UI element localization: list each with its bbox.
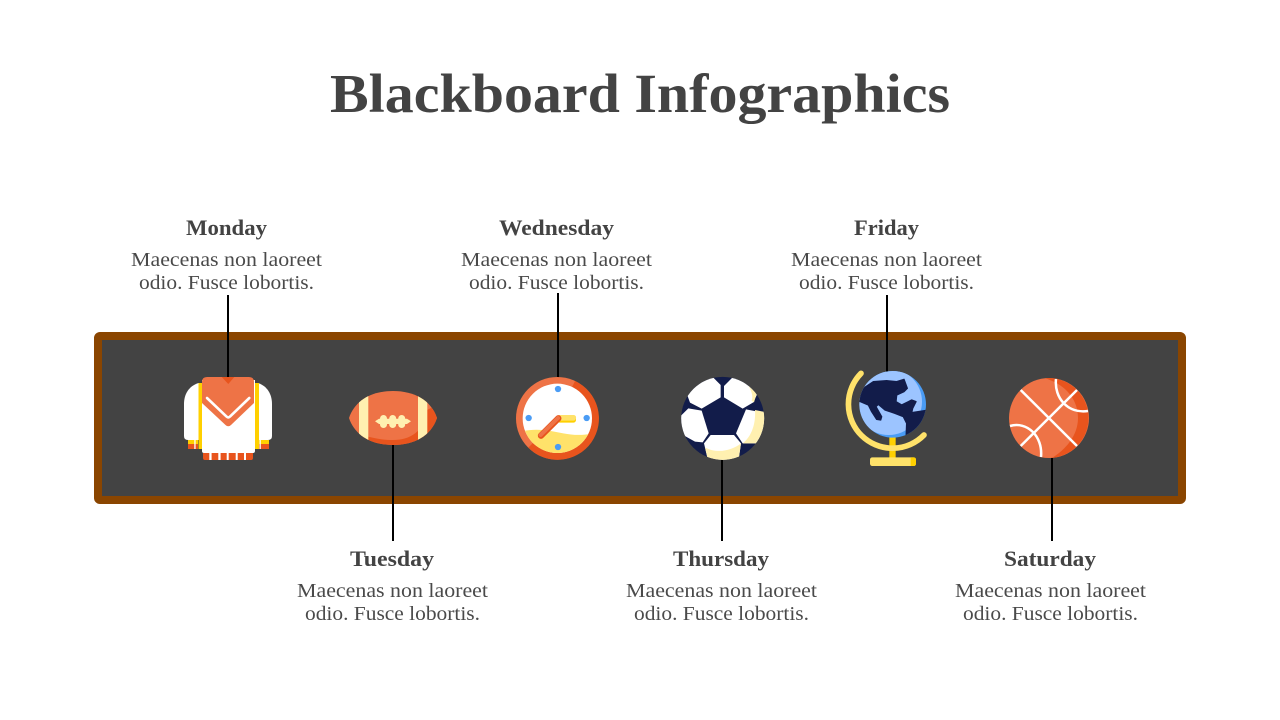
text: Friday: Maecenas non laoreet bbox=[791, 249, 982, 271]
text: Tuesday: odio. Fusce lobortis. bbox=[305, 603, 480, 625]
icon: basketball bbox=[1009, 378, 1089, 458]
text: Friday bbox=[791, 215, 982, 294]
blackboard panel bbox=[98, 336, 1182, 500]
text: Friday: Friday bbox=[854, 215, 919, 240]
icon: football bbox=[349, 391, 437, 446]
connector: Saturday bbox=[1051, 457, 1053, 541]
text: Monday: Maecenas non laoreet bbox=[131, 249, 322, 271]
text: Monday: odio. Fusce lobortis. bbox=[139, 272, 314, 294]
text: Saturday: Maecenas non laoreet bbox=[955, 580, 1146, 602]
connector: Tuesday bbox=[392, 444, 394, 541]
text: Wednesday: Maecenas non laoreet bbox=[461, 249, 652, 271]
connector: Monday bbox=[227, 295, 229, 379]
text: Thursday: Thursday bbox=[673, 546, 769, 571]
connector: Wednesday bbox=[557, 293, 559, 378]
text: Saturday: odio. Fusce lobortis. bbox=[963, 603, 1138, 625]
text: Saturday: Saturday bbox=[1004, 546, 1096, 571]
connector: Friday bbox=[886, 295, 888, 373]
text: Thursday bbox=[626, 546, 817, 625]
icon: soccer ball bbox=[680, 377, 767, 462]
text: Wednesday: odio. Fusce lobortis. bbox=[469, 272, 644, 294]
text: Thursday: Maecenas non laoreet bbox=[626, 580, 817, 602]
text: Wednesday: Wednesday bbox=[499, 215, 614, 240]
text: Monday: Monday bbox=[186, 215, 267, 240]
text: Thursday: odio. Fusce lobortis. bbox=[634, 603, 809, 625]
text: Tuesday bbox=[297, 546, 488, 625]
text: Friday: odio. Fusce lobortis. bbox=[799, 272, 974, 294]
title: Blackboard Infographics bbox=[330, 63, 950, 124]
connector: Thursday bbox=[721, 459, 723, 541]
icon: globe bbox=[848, 368, 928, 466]
text: Tuesday: Maecenas non laoreet bbox=[297, 580, 488, 602]
icon: sweater bbox=[184, 377, 272, 460]
icon: clock bbox=[516, 377, 599, 460]
text: Saturday bbox=[955, 546, 1146, 625]
text: Tuesday: Tuesday bbox=[350, 546, 434, 571]
text: Wednesday bbox=[461, 215, 652, 294]
text: Monday bbox=[131, 215, 322, 294]
